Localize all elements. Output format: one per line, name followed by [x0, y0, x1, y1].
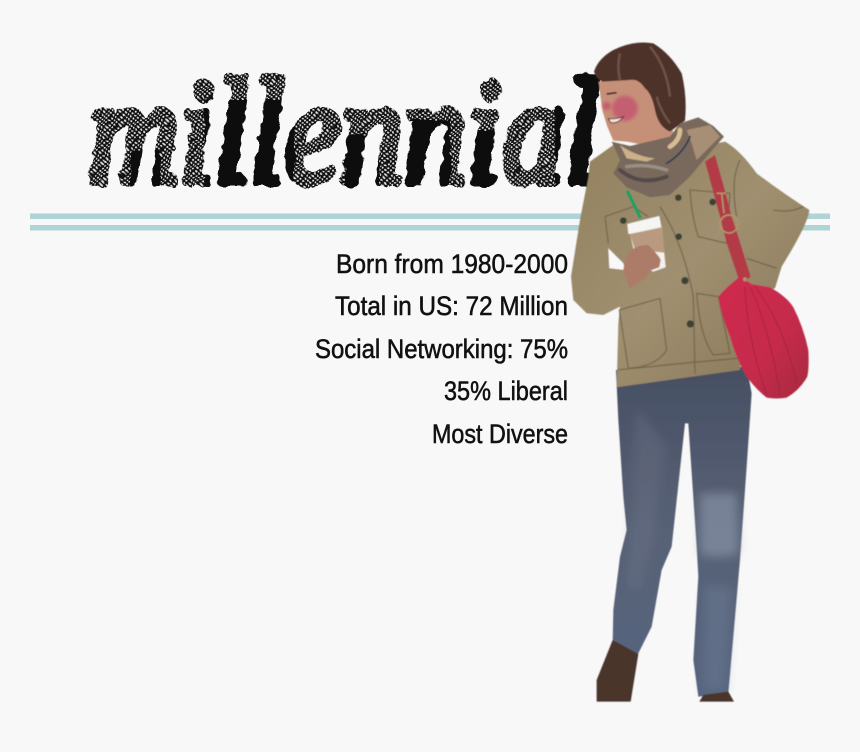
bag strap [705, 155, 751, 285]
hand [623, 245, 661, 288]
jeans [613, 367, 752, 697]
double teal divider [30, 214, 830, 230]
hair highlights [618, 47, 670, 123]
title: millennial: millennial [88, 49, 600, 215]
bag ring and clasp [717, 193, 738, 233]
under-arm gap [608, 248, 625, 270]
bag stud [743, 277, 747, 281]
red bag [718, 277, 809, 398]
upper body [571, 42, 809, 398]
coffee cup [630, 227, 666, 272]
facts list: Most Diverse [432, 419, 568, 449]
cup lid [627, 216, 661, 234]
facts list: 35% Liberal [444, 376, 568, 406]
face and neck [598, 73, 673, 147]
cup sleeve [630, 227, 665, 253]
jacket buttons [620, 194, 716, 328]
coffee straw [627, 191, 641, 218]
nose tip [602, 102, 611, 110]
bag folds [745, 287, 797, 395]
facts list: Total in US: 72 Million [335, 291, 568, 321]
facts list: Born from 1980-2000 [336, 249, 568, 279]
hair [594, 42, 686, 132]
person: woman with coffee and red bag [571, 42, 809, 702]
jacket shading and seams [605, 160, 803, 373]
scarf [612, 117, 724, 197]
title: millennial: millennial [88, 49, 600, 215]
title: millennial [88, 72, 600, 189]
scarf pattern [620, 125, 720, 180]
facts list [315, 249, 568, 449]
cheek blush [612, 96, 638, 121]
facts list: Social Networking: 75% [315, 334, 568, 364]
smile [608, 117, 623, 123]
jacket [571, 142, 809, 387]
eye [607, 93, 617, 94]
boots [597, 640, 734, 702]
